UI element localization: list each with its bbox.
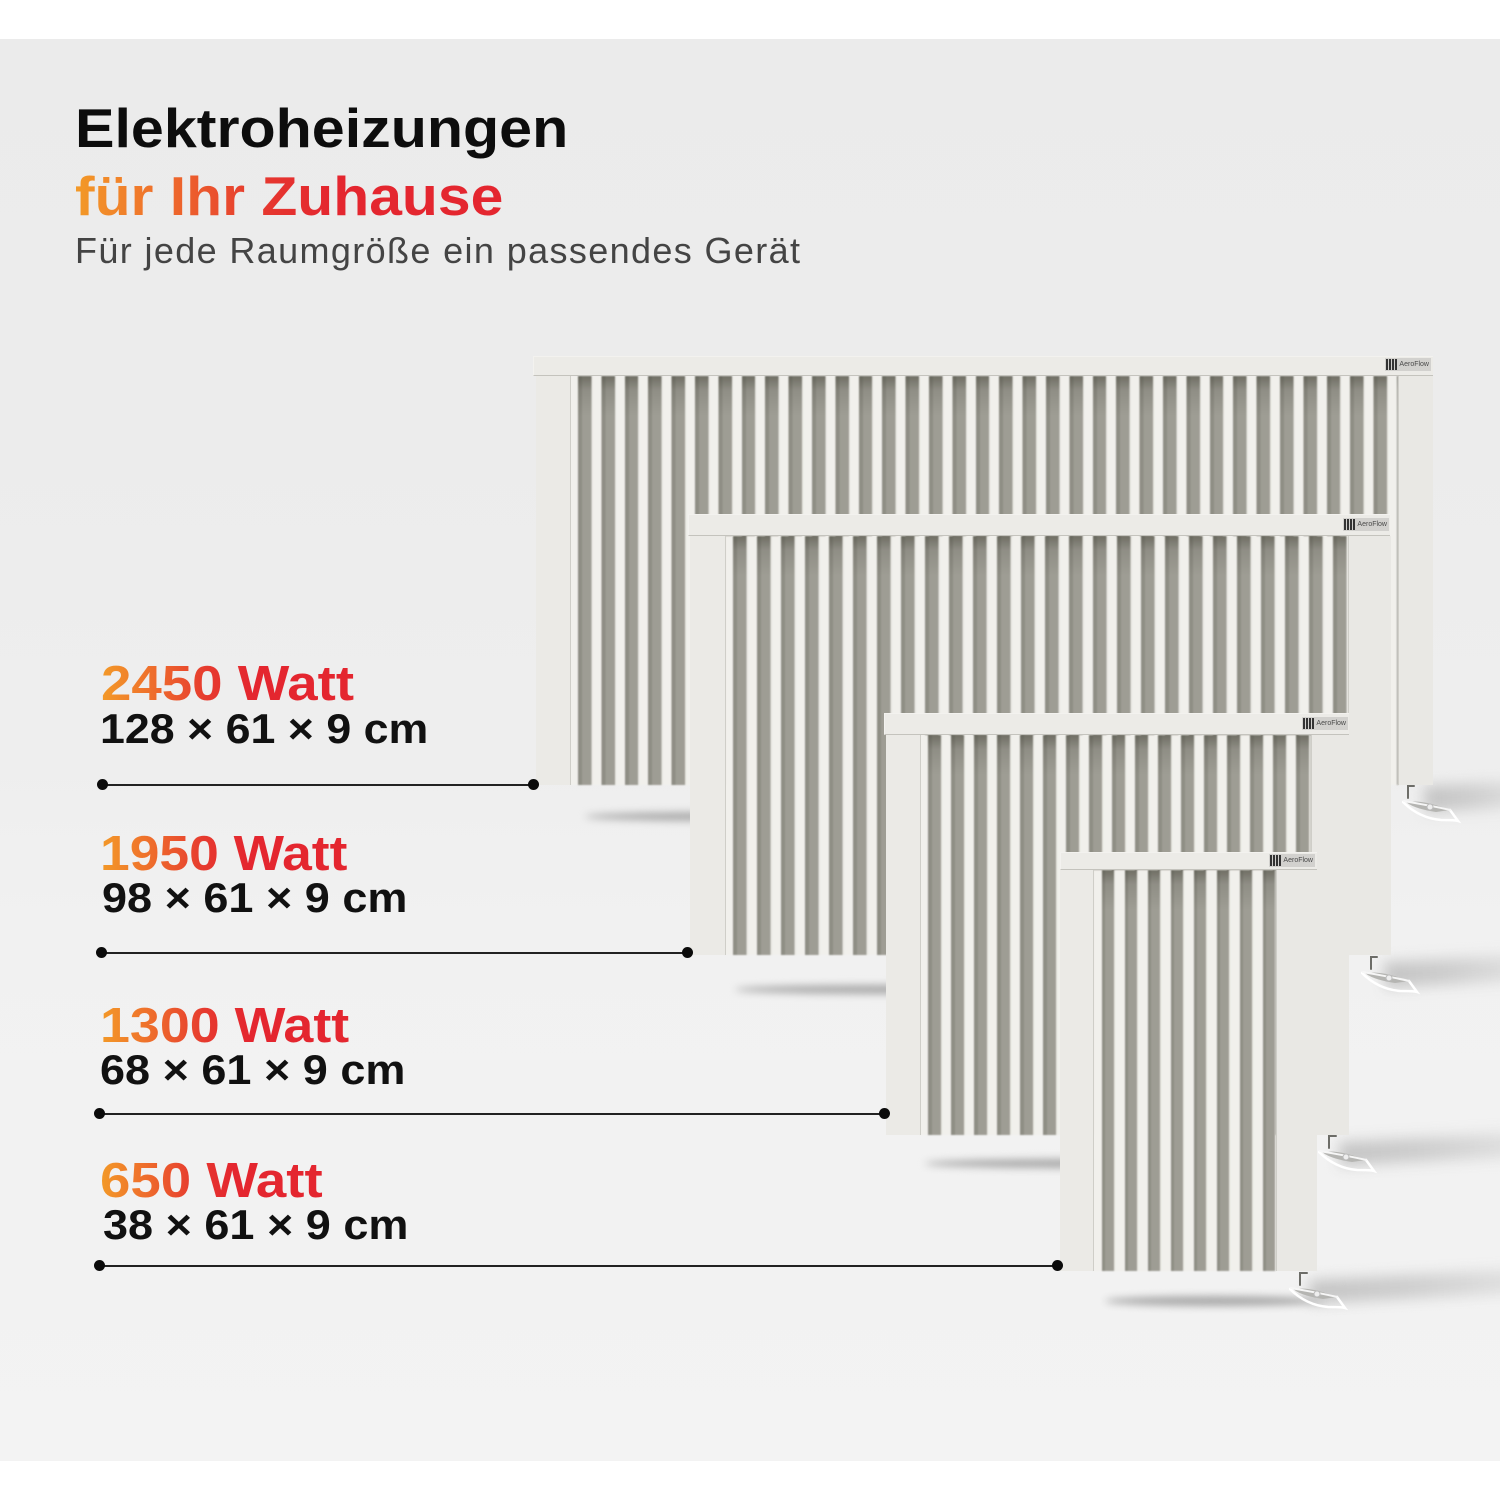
radiator: 1300 Watt xyxy=(884,713,1349,1136)
right panel xyxy=(1348,536,1391,955)
right panel xyxy=(1276,870,1317,1271)
shadow: radiator 3 xyxy=(925,1159,1225,1168)
top bar xyxy=(1060,852,1317,870)
fins xyxy=(1093,870,1276,1271)
wall shadow: radiator 4 xyxy=(1309,1269,1500,1304)
wall shadow: radiator 2 xyxy=(1384,955,1500,988)
top bar xyxy=(533,356,1433,376)
heading: für Ihr Zuhause: für Ihr Zuhause xyxy=(75,165,503,227)
spec: 1950 Watt xyxy=(96,827,693,958)
left panel xyxy=(886,735,921,1135)
icon: power cable 1 xyxy=(1402,785,1461,823)
radiator: 1950 Watt xyxy=(688,514,1391,956)
leader line xyxy=(94,1108,890,1119)
wattage: 1300 Watt xyxy=(100,999,349,1053)
logo: AeroFlow xyxy=(1316,720,1346,727)
left panel xyxy=(536,376,571,785)
logo: AeroFlow xyxy=(1357,521,1387,528)
spec: 2450 Watt xyxy=(97,657,539,790)
shadow: radiator 1 xyxy=(585,812,885,821)
wall shadow: radiator 3 xyxy=(1339,1132,1500,1166)
logo: AeroFlow xyxy=(1283,857,1313,864)
shadow: radiator 4 xyxy=(1105,1296,1325,1306)
wattage: 2450 Watt xyxy=(101,657,354,711)
wall shadow: radiator 1 xyxy=(1424,781,1500,812)
top bar xyxy=(884,713,1349,735)
title block xyxy=(75,97,801,271)
top bar xyxy=(688,514,1390,536)
dimensions: 128 × 61 × 9 cm xyxy=(100,705,428,752)
right panel xyxy=(1398,376,1433,785)
logo xyxy=(1302,717,1348,730)
shadow: radiator 2 xyxy=(735,985,1035,994)
icon: power cable 2 xyxy=(1361,956,1420,994)
right panel xyxy=(1311,735,1349,1135)
dimensions: 68 × 61 × 9 cm xyxy=(100,1046,405,1093)
wattage: 650 Watt xyxy=(100,1154,323,1208)
fins xyxy=(920,735,1311,1135)
icon: power cable 4 xyxy=(1289,1272,1348,1310)
spec: 1300 Watt xyxy=(94,999,890,1119)
logo xyxy=(1385,358,1431,371)
subtitle: Für jede Raumgröße ein passendes Gerät xyxy=(75,230,801,271)
heading: Elektroheizungen: Elektroheizungen xyxy=(75,97,568,159)
dimensions: 38 × 61 × 9 cm xyxy=(103,1201,408,1248)
fins xyxy=(570,376,1398,785)
leader line xyxy=(96,947,693,958)
left panel xyxy=(1060,870,1094,1271)
spec: 650 Watt xyxy=(94,1154,1063,1271)
radiator: 650 Watt xyxy=(1060,852,1317,1272)
icon: power cable 3 xyxy=(1318,1135,1377,1173)
leader line xyxy=(94,1260,1063,1271)
logo xyxy=(1269,854,1315,867)
leader line xyxy=(97,779,539,790)
logo: AeroFlow xyxy=(1399,361,1429,368)
left panel xyxy=(690,536,726,955)
logo xyxy=(1343,518,1389,531)
radiator: 2450 Watt xyxy=(533,358,1433,786)
dimensions: 98 × 61 × 9 cm xyxy=(102,874,407,921)
fins xyxy=(725,536,1349,955)
wattage: 1950 Watt xyxy=(100,827,347,881)
